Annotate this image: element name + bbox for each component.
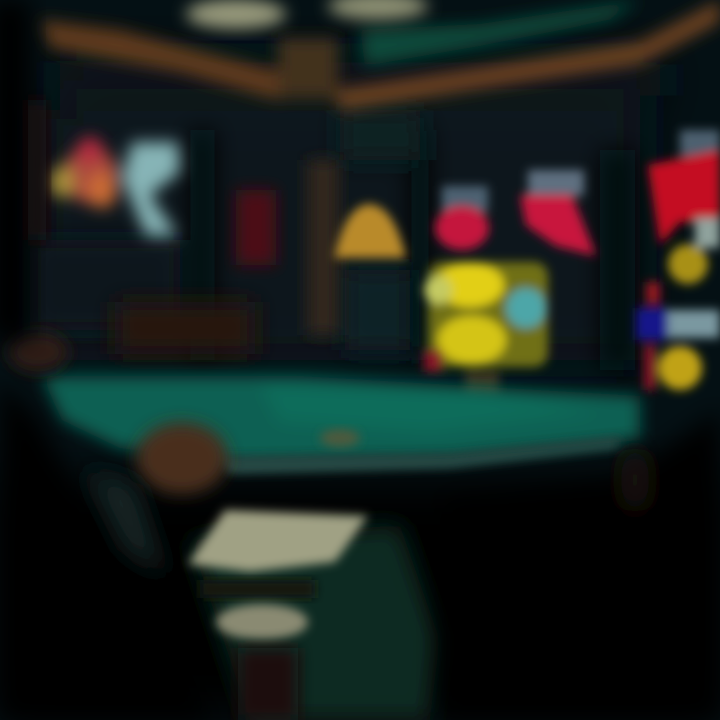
ceiling beams xyxy=(40,0,720,110)
small table object xyxy=(320,429,360,447)
lower green floor xyxy=(190,525,440,720)
ceiling green panel xyxy=(360,0,640,66)
table edge highlight xyxy=(220,438,620,474)
red shapes with pale tops xyxy=(435,170,596,256)
right sign stack xyxy=(636,130,720,390)
left sign: coloured circle and pale C xyxy=(50,137,180,236)
dark red panel xyxy=(236,190,276,265)
lower left brown shelf xyxy=(115,302,255,354)
pool table surface xyxy=(42,376,640,462)
foreground brown head xyxy=(136,422,228,494)
foreground left silhouette xyxy=(0,380,210,720)
left figure head xyxy=(8,332,68,372)
stool base xyxy=(238,648,298,720)
pale foreground table xyxy=(188,510,368,572)
central wooden pillar xyxy=(307,160,339,335)
grey blue chair xyxy=(85,470,165,575)
lamp xyxy=(334,204,406,258)
foreground right silhouette xyxy=(440,410,720,720)
wall vertical panels xyxy=(30,110,635,370)
pale stool top xyxy=(216,604,308,640)
ceiling lights xyxy=(186,0,428,29)
left dark pillar xyxy=(0,0,30,340)
right brown glow xyxy=(621,448,649,512)
foreground table dark base xyxy=(200,580,315,598)
yellow central figure xyxy=(424,262,548,400)
